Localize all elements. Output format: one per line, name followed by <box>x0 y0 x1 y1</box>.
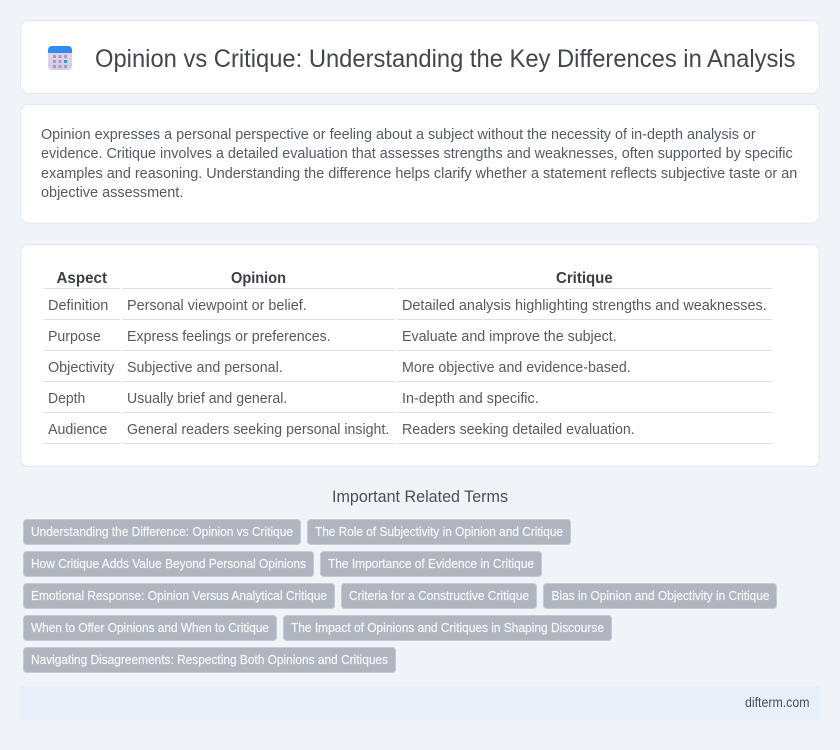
table row: purpose: Evaluate and improve the subject. <box>402 329 617 345</box>
tag <box>308 520 570 544</box>
table row: objectivity <box>48 360 631 376</box>
tag: The Importance of Evidence in Critique <box>328 556 534 571</box>
footer <box>20 686 820 720</box>
tag <box>544 584 776 608</box>
table row: purpose: Express feelings or preferences. <box>127 329 331 345</box>
icon: calendar <box>48 46 72 70</box>
table row: audience: Readers seeking detailed evaluation. <box>402 422 635 438</box>
tag: Emotional Response: Opinion Versus Analytical Critique <box>31 588 327 603</box>
panel: header <box>20 20 820 94</box>
table row: depth: In-depth and specific. <box>402 391 539 407</box>
tag <box>24 648 396 672</box>
tag: The Impact of Opinions and Critiques in Shaping Discourse <box>291 620 604 635</box>
tag: Understanding the Difference: Opinion vs Critique <box>31 524 293 539</box>
table header row: Critique <box>556 270 613 287</box>
table row: depth: Usually brief and general. <box>127 391 287 407</box>
table row: purpose <box>48 329 617 345</box>
tag <box>24 552 314 576</box>
tag <box>284 616 612 640</box>
tag group: related terms <box>24 520 776 672</box>
table row: audience: General readers seeking personal insight. <box>127 422 389 438</box>
heading: related terms: Important Related Terms <box>332 488 508 506</box>
table header row: Aspect <box>56 270 108 287</box>
tag <box>342 584 536 608</box>
table row: objectivity: Subjective and personal. <box>127 360 283 376</box>
tag <box>24 584 334 608</box>
table row: purpose: Purpose <box>48 329 101 345</box>
tag: Criteria for a Constructive Critique <box>349 588 529 603</box>
tag: Bias in Opinion and Objectivity in Critique <box>552 588 770 603</box>
table row: objectivity: Objectivity <box>48 360 115 376</box>
tag: The Role of Subjectivity in Opinion and Critique <box>315 524 563 539</box>
panel: comparison table <box>20 244 820 466</box>
text block: introduction: examples and reasoning. Understanding the difference helps clarify whether a statement reflects subjective taste or an <box>41 165 797 182</box>
tag <box>320 552 542 576</box>
text block: introduction: objective assessment. <box>41 184 183 201</box>
tag: Navigating Disagreements: Respecting Both Opinions and Critiques <box>31 652 388 667</box>
tag <box>24 520 300 544</box>
text block: introduction: evidence. Critique involves a detailed evaluation that assesses strengths and weaknesses, often supported by specific <box>41 145 793 162</box>
table row: definition <box>48 298 767 314</box>
title: Opinion vs Critique: Understanding the Key Differences in Analysis <box>95 45 796 73</box>
table row: definition: Definition <box>48 298 108 314</box>
table row: objectivity: More objective and evidence-based. <box>402 360 631 376</box>
table row: definition: Personal viewpoint or belief. <box>127 298 307 314</box>
table header row: Opinion <box>231 270 286 287</box>
table header row <box>56 270 613 287</box>
footer text: difterm.com <box>745 695 810 710</box>
table row: depth: Depth <box>48 391 85 407</box>
table row: audience <box>48 422 635 438</box>
text block: introduction <box>41 126 797 201</box>
table row: definition: Detailed analysis highlighting strengths and weaknesses. <box>402 298 767 314</box>
panel: introduction <box>20 104 820 223</box>
tag: When to Offer Opinions and When to Critique <box>31 620 269 635</box>
table row: depth <box>48 391 539 407</box>
text block: introduction: Opinion expresses a personal perspective or feeling about a subject without the necessity of in-depth analysis or <box>41 126 756 143</box>
tag <box>24 616 276 640</box>
table row: audience: Audience <box>48 422 107 438</box>
tag: How Critique Adds Value Beyond Personal Opinions <box>31 556 306 571</box>
